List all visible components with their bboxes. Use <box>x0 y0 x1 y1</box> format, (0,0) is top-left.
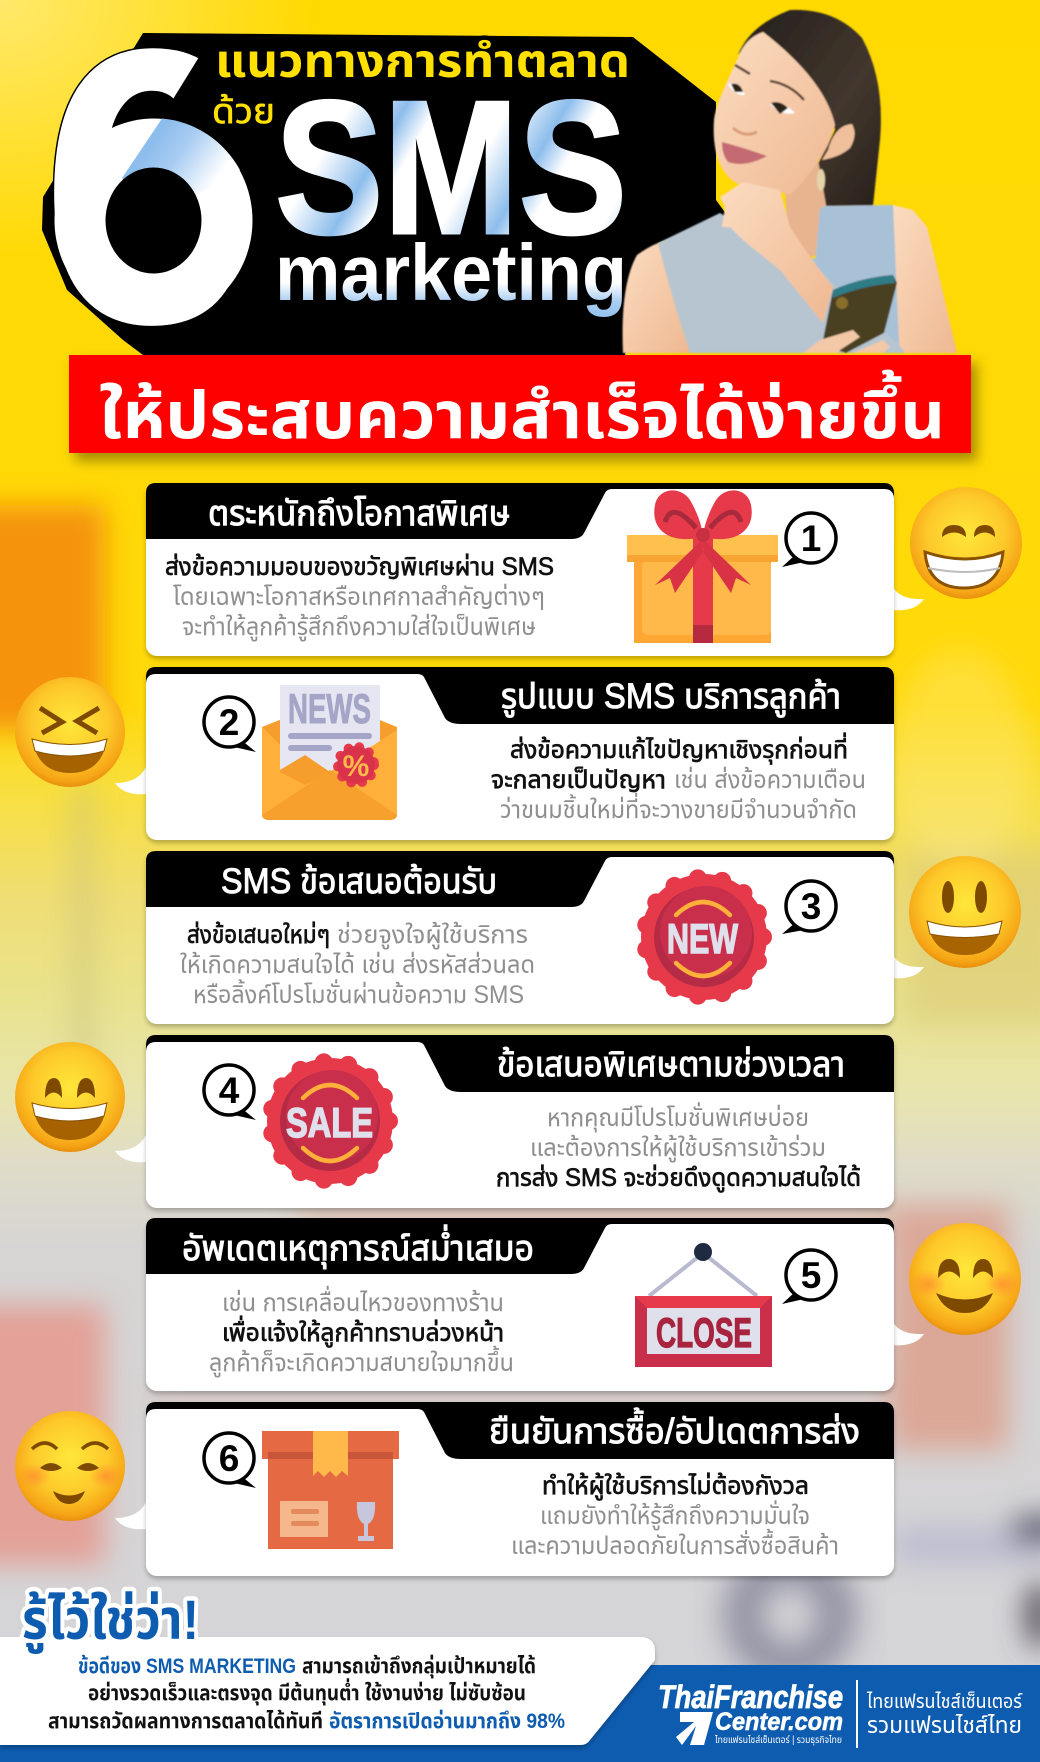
panel 6: purchase and shipping confirmation <box>115 1402 894 1576</box>
icon: newsletter envelope: % <box>343 750 369 783</box>
body text: เช่น การเคลื่อนไหวของทางร้าน <box>222 1285 504 1317</box>
body text: โดยเฉพาะโอกาสหรือเทศกาลสำคัญต่างๆ <box>173 583 545 611</box>
body text: ส่งข้อความมอบของขวัญพิเศษผ่าน SMS <box>165 553 554 581</box>
lips <box>722 142 767 164</box>
emoji 6: smiling blush <box>15 1411 125 1521</box>
icon: parcel box <box>262 1431 399 1549</box>
icon: NEW badge: NEW <box>667 915 738 962</box>
right arm <box>893 205 957 353</box>
word: with: ด้วย <box>212 92 275 131</box>
body text: และต้องการให้ผู้ใช้บริการเข้าร่วม <box>530 1134 826 1163</box>
icon: newsletter envelope: NEWS <box>288 685 371 732</box>
number bubble 5: 5 <box>801 1255 821 1296</box>
ear <box>822 124 855 160</box>
icon: SALE badge <box>267 1058 393 1184</box>
number bubble 6: 6 <box>219 1438 239 1479</box>
hair <box>738 10 881 210</box>
eyes and brows <box>728 83 795 114</box>
body text: หากคุณมีโปรโมชั่นพิเศษบ่อย <box>547 1101 809 1133</box>
left arm <box>623 243 690 353</box>
body text <box>491 732 866 824</box>
face <box>714 32 835 195</box>
panel 1: special occasions <box>146 483 924 656</box>
icon: arrow <box>676 1712 713 1745</box>
heading: ยืนยันการซื้อ/อัปเดตการส่ง <box>489 1407 860 1451</box>
body text: ส่งข้อความแก้ไขปัญหาเชิงรุกก่อนที่ <box>510 732 848 765</box>
number bubble 4 <box>204 1065 256 1120</box>
body text <box>165 553 554 642</box>
neck <box>785 160 826 262</box>
6 counter <box>106 168 202 274</box>
number bubble 4: 4 <box>219 1070 240 1111</box>
emoji 3: big smile <box>909 856 1021 968</box>
footer tagline: ไทยแฟรนไชส์เซ็นเตอร์ <box>866 1691 1023 1713</box>
phone <box>822 275 897 353</box>
panel 4: timed special offer <box>115 1035 894 1208</box>
number bubble 5 <box>782 1250 836 1304</box>
body text <box>496 1101 861 1193</box>
body text <box>511 1472 839 1560</box>
panel: did you know <box>0 1637 655 1745</box>
body text <box>180 921 535 1009</box>
did-you-know heading: รู้ไว้ใช่ว่า! <box>22 1588 199 1654</box>
emoji 5: blushing smile <box>909 1223 1021 1335</box>
fingers <box>803 330 890 353</box>
callout text: ข้อดีของ SMS MARKETING <box>78 1655 296 1678</box>
icon: SALE badge: SALE <box>286 1099 373 1146</box>
icon: NEW badge <box>641 874 767 1000</box>
marketing wordmark: marketing <box>275 228 627 317</box>
number bubble 1: 1 <box>801 518 821 559</box>
footer divider <box>856 1680 858 1748</box>
title line: yellow Thai heading: แนวทางการทำตลาด <box>215 35 630 87</box>
heading: ข้อเสนอพิเศษตามช่วงเวลา <box>497 1045 845 1084</box>
heading: อัพเดตเหตุการณ์สม่ำเสมอ <box>182 1224 534 1269</box>
icon: CLOSE sign: CLOSE <box>656 1309 752 1356</box>
number bubble 2 <box>204 697 256 752</box>
number bubble 3 <box>782 881 836 934</box>
logo: ThaiFranchise Center <box>658 1679 843 1746</box>
footer tagline: รวมแฟรนไชส์ไทย <box>867 1712 1022 1738</box>
woman photo illustration <box>623 10 957 353</box>
number bubble 2: 2 <box>219 702 239 743</box>
body text: เพื่อแจ้งให้ลูกค้าทราบล่วงหน้า <box>222 1315 504 1348</box>
icon: gift box <box>627 490 778 643</box>
body text: แถมยังทำให้รู้สึกถึงความมั่นใจ <box>540 1499 810 1531</box>
body text: หรือลิ้งค์โปรโมชั่นผ่านข้อความ SMS <box>193 978 524 1009</box>
body text: ว่าขนมชิ้นใหม่ที่จะวางขายมีจำนวนจำกัด <box>500 792 857 824</box>
body text: เช่น ส่งข้อความเตือน <box>674 766 866 794</box>
number bubble 3: 3 <box>801 886 821 927</box>
panel 3: welcome offer <box>146 851 924 1024</box>
callout text: อัตราการเปิดอ่านมากถึง 98% <box>329 1710 565 1733</box>
number bubble 6 <box>204 1433 256 1488</box>
body text: ทำให้ผู้ใช้บริการไม่ต้องกังวล <box>542 1472 809 1501</box>
heading: ตระหนักถึงโอกาสพิเศษ <box>208 494 510 533</box>
heading: รูปแบบ SMS บริการลูกค้า <box>501 677 841 717</box>
6 top notch <box>157 36 270 125</box>
red subtitle banner: ให้ประสบความสำเร็จได้ง่ายขึ้น <box>99 369 945 452</box>
callout text: สามารถวัดผลทางการตลาดได้ทันที <box>48 1710 323 1733</box>
panel 5: regular event updates <box>146 1218 924 1391</box>
heading: SMS ข้อเสนอต้อนรับ <box>221 862 497 901</box>
body text: ลูกค้าก็จะเกิดความสบายใจมากขึ้น <box>209 1345 514 1378</box>
earring <box>817 169 825 191</box>
emoji 4: grin <box>15 1042 125 1152</box>
icon: CLOSE sign <box>635 1243 772 1367</box>
body text: จะทำให้ลูกค้ารู้สึกถึงความใส่ใจเป็นพิเศษ <box>182 613 536 642</box>
header black backdrop <box>42 33 727 355</box>
forearm and hand <box>720 182 833 323</box>
emoji 2: squinting laugh <box>15 677 125 787</box>
logo: ThaiFranchise Center: ThaiFranchise <box>658 1679 843 1715</box>
dress <box>658 205 905 353</box>
emoji 1: grinning <box>910 487 1022 599</box>
6 bowl <box>54 118 252 322</box>
footer blue band <box>0 1665 1040 1762</box>
callout text <box>48 1655 565 1733</box>
icon: newsletter envelope <box>262 685 397 820</box>
red subtitle banner <box>69 355 971 453</box>
body text: และความปลอดภัยในการสั่งซื้อสินค้า <box>511 1528 839 1560</box>
callout text: สามารถเข้าถึงกลุ่มเป้าหมายได้ <box>302 1655 536 1679</box>
logo: ThaiFranchise Center: ไทยแฟรนไชส์เซ็นเตอร์ | รวมธุรกิจไทย <box>714 1733 842 1746</box>
body text: จะกลายเป็นปัญหา <box>491 766 666 794</box>
number bubble 1 <box>782 513 836 567</box>
callout text: อย่างรวดเร็วและตรงจุด มีต้นทุนต่ำ ใช้งานง่าย ไม่ซับซ้อน <box>88 1678 526 1706</box>
logo: ThaiFranchise Center: Center.com <box>715 1708 843 1736</box>
SMS wordmark: SMS <box>275 62 627 274</box>
body text: การส่ง SMS จะช่วยดึงดูดความสนใจได้ <box>496 1164 861 1193</box>
footer tagline <box>866 1691 1023 1738</box>
body text <box>209 1285 514 1378</box>
panel 2: customer service SMS <box>115 667 894 840</box>
6 shaded shoulder <box>122 118 240 220</box>
body text: ช่วยจูงใจผู้ใช้บริการ <box>337 921 528 950</box>
body text: ให้เกิดความสนใจได้ เช่น ส่งรหัสส่วนลด <box>180 951 535 979</box>
body text: ส่งข้อเสนอใหม่ๆ <box>187 921 330 949</box>
